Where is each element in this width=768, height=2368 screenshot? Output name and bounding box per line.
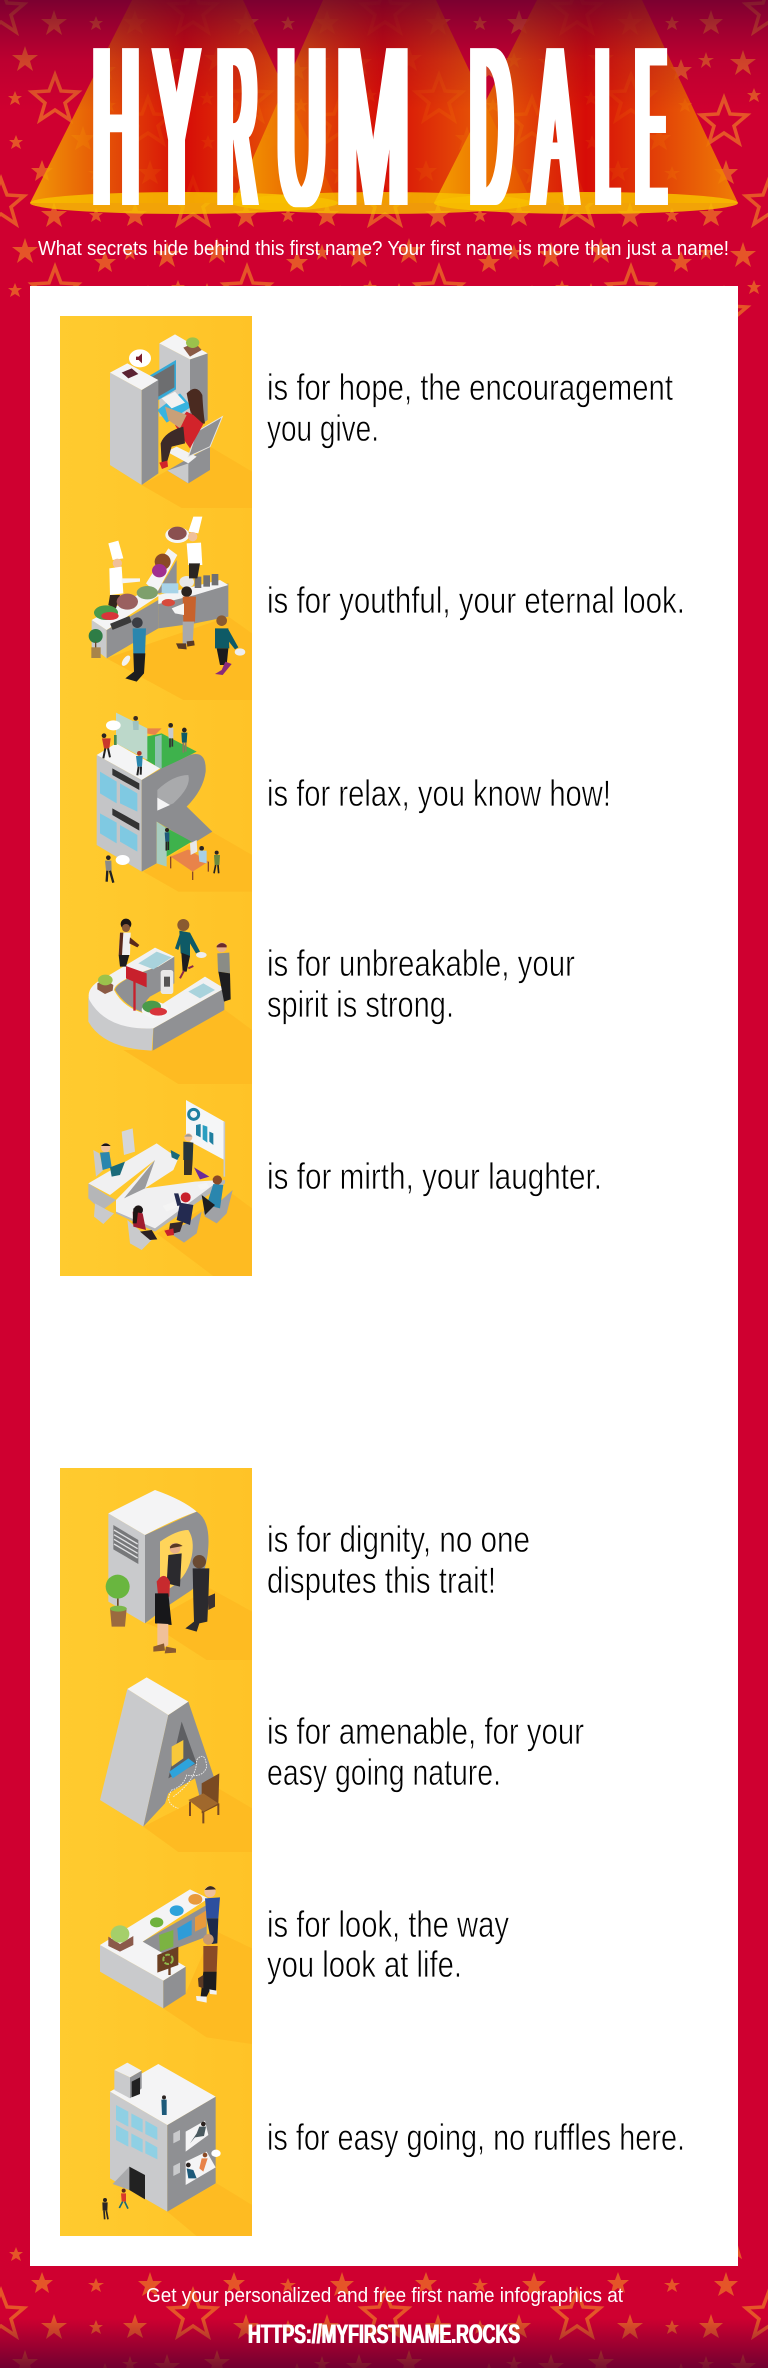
text: H: is for hope, the encouragement bbox=[267, 367, 674, 408]
text: A: is for amenable, for your bbox=[267, 1711, 584, 1752]
text: R: is for relax, you know how! bbox=[267, 773, 611, 814]
title: R bbox=[218, 0, 256, 254]
title: H bbox=[94, 0, 138, 254]
title: M bbox=[337, 0, 409, 254]
text: L: you look at life. bbox=[267, 1944, 462, 1985]
icon: letter Y bbox=[89, 517, 252, 700]
text: U bbox=[267, 943, 575, 1025]
icon: letter H bbox=[110, 334, 252, 508]
subtitle: What secrets hide behind this first name? Your first name is more than just a name! bbox=[38, 238, 729, 260]
panel: white card bbox=[30, 286, 738, 2266]
text: D: disputes this trait! bbox=[267, 1560, 496, 1601]
footer line: Get your personalized and free first name infographics at bbox=[146, 2285, 623, 2307]
text: M: is for mirth, your laughter. bbox=[267, 1156, 602, 1197]
panel: yellow strip lower bbox=[60, 1468, 252, 2236]
text: L: is for look, the way bbox=[267, 1904, 509, 1945]
icon: letter R bbox=[97, 713, 252, 892]
spotlights bbox=[30, 0, 738, 214]
icon: letter E bbox=[102, 2063, 252, 2236]
icon: letter U bbox=[88, 919, 252, 1084]
text: H: you give. bbox=[267, 408, 379, 449]
text: L bbox=[267, 1904, 509, 1985]
text: A: easy going nature. bbox=[267, 1752, 501, 1793]
footer url: HTTPS://MYFIRSTNAME.ROCKS bbox=[248, 2319, 520, 2349]
panel: yellow strip upper bbox=[60, 316, 252, 1276]
title: A bbox=[534, 0, 576, 254]
text: H bbox=[267, 367, 674, 449]
title: D bbox=[471, 0, 511, 254]
icon: letter D bbox=[106, 1490, 252, 1660]
text: D bbox=[267, 1519, 530, 1601]
icon: letter L bbox=[100, 1886, 252, 2044]
text: U: is for unbreakable, your bbox=[267, 943, 575, 984]
icon: letter A bbox=[100, 1677, 252, 1852]
title: L bbox=[598, 0, 617, 254]
text: U: spirit is strong. bbox=[267, 984, 454, 1025]
title: U bbox=[278, 0, 325, 254]
title: Y bbox=[155, 0, 198, 254]
icon: letter M bbox=[88, 1100, 252, 1276]
text: D: is for dignity, no one bbox=[267, 1519, 530, 1560]
text: A bbox=[267, 1711, 584, 1793]
